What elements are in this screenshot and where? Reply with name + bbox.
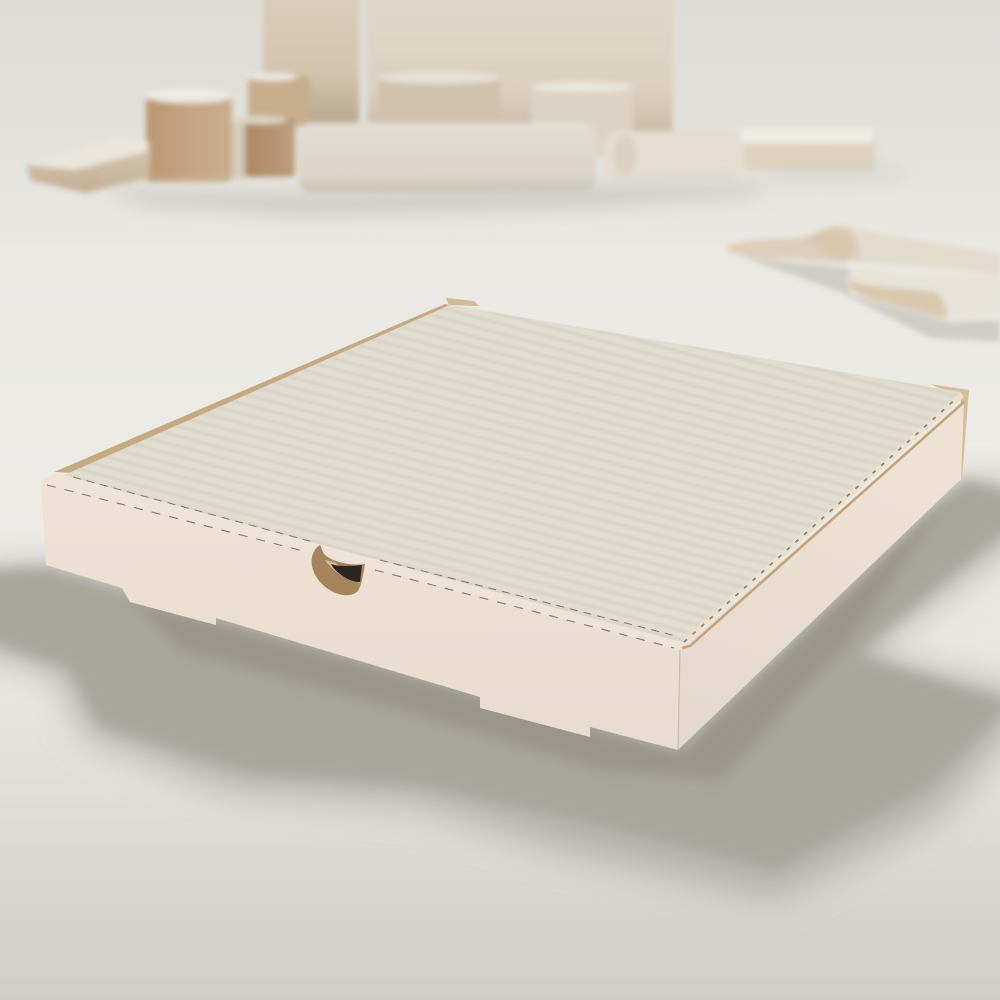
flat box right xyxy=(744,130,876,171)
pizza box xyxy=(41,298,969,750)
short roll xyxy=(604,131,742,181)
notch dark interior xyxy=(331,564,362,582)
flat tray left xyxy=(27,137,150,193)
lower strip tan fold xyxy=(850,280,946,318)
kraft corner tab back xyxy=(446,298,479,306)
right back cylinder xyxy=(531,84,633,156)
lower dashed front crease xyxy=(47,485,307,552)
kraft right corner tab xyxy=(930,384,969,480)
background packaging shadow xyxy=(105,166,915,216)
right side wall xyxy=(678,402,964,750)
notch hole xyxy=(312,545,365,595)
soft outer shadow xyxy=(0,480,1000,900)
notch inner paper band xyxy=(325,560,360,583)
lower strip xyxy=(847,267,1000,319)
lid top xyxy=(62,305,961,642)
right lid flap xyxy=(681,392,964,645)
tall box xyxy=(367,0,673,132)
cream block beside cylinder xyxy=(214,122,248,179)
back cylinder xyxy=(378,76,500,126)
long horizontal roll xyxy=(298,123,596,193)
upper strip pale band xyxy=(848,228,1000,273)
corner fold edge xyxy=(678,650,680,750)
folded strips at right xyxy=(725,226,1000,342)
small kraft cylinder xyxy=(245,118,295,177)
upper strip scoop xyxy=(806,230,855,262)
upper strip xyxy=(725,226,1000,274)
shadow core xyxy=(0,480,1000,870)
small kraft cylinder back xyxy=(248,76,310,126)
kraft back edge xyxy=(54,304,452,473)
kraft cylinder xyxy=(146,94,232,182)
upper dashed crease right of notch xyxy=(380,560,676,636)
kraft right lid edge xyxy=(682,402,964,648)
tall tube xyxy=(263,0,359,125)
upper dashed front crease xyxy=(73,477,313,542)
lower dashed crease right of notch xyxy=(375,570,674,648)
lid front flap xyxy=(41,473,681,650)
thumb notch xyxy=(312,545,365,595)
dark contact shadow xyxy=(130,482,960,780)
strip shadow xyxy=(745,258,1000,342)
front wall xyxy=(41,481,680,750)
lid corrugated stripes xyxy=(62,305,961,642)
cast shadow of box xyxy=(0,480,1000,900)
dotted right crease xyxy=(684,397,958,642)
blurred packaging group in background xyxy=(27,0,876,193)
